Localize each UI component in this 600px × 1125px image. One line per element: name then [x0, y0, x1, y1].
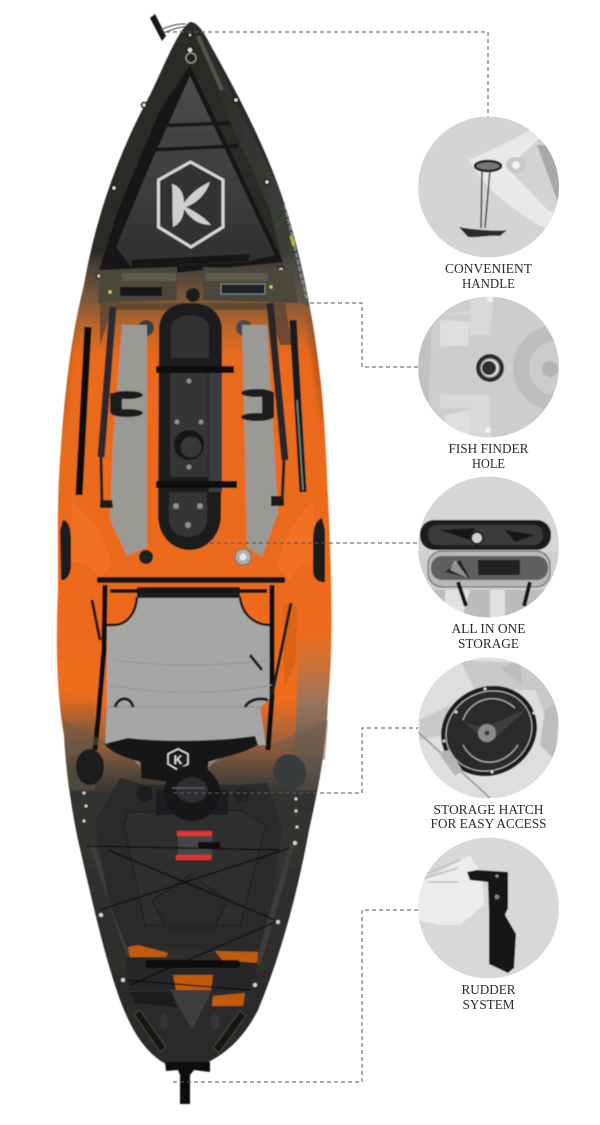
dashed leader lines: [166, 32, 488, 1082]
rear deck: [82, 792, 298, 1053]
deck clips: [96, 33, 284, 278]
centre storage pod: [156, 303, 237, 550]
rails: [79, 303, 303, 508]
side pads: [64, 720, 328, 794]
label: FOR EASY ACCESS: [430, 816, 546, 831]
deck knobs: [139, 549, 251, 565]
label: [448, 441, 528, 471]
bungee cords: [87, 846, 290, 990]
cockpit mats: [110, 325, 278, 557]
label: STORAGE HATCH: [434, 802, 544, 817]
label: CONVENIENT: [445, 261, 533, 276]
label: STORAGE: [458, 636, 519, 651]
photo: handle: [418, 116, 562, 258]
feature: convenient handle: [418, 116, 562, 291]
hull: [57, 22, 332, 1066]
seat: [92, 577, 291, 750]
photo: hatch: [418, 657, 560, 799]
hull shading: [54, 30, 334, 965]
side handles: [60, 518, 325, 582]
straps: [156, 366, 237, 488]
stern recesses: [160, 1014, 220, 1030]
label: [452, 621, 526, 651]
photo: fish finder hole: [418, 296, 559, 438]
feature: fish finder hole: [418, 296, 559, 468]
bow bag: [96, 33, 284, 278]
photo: rudder: [416, 837, 559, 979]
feature: rudder system: [416, 837, 559, 1012]
label: FISH FINDER: [448, 441, 528, 456]
bow handle: [150, 14, 187, 41]
seat front with logo: K: [174, 753, 183, 767]
photo: storage: [418, 476, 560, 620]
logo: [158, 162, 223, 247]
label: HANDLE: [462, 276, 515, 291]
stern rudder mount: [165, 1062, 210, 1104]
label: HOLE: [472, 456, 505, 471]
label: [462, 982, 516, 1012]
label: SYSTEM: [462, 997, 514, 1012]
label: RUDDER: [462, 982, 516, 997]
bow deck moulding: [98, 267, 298, 345]
safety sticker: [176, 831, 220, 860]
fittings: [82, 792, 298, 987]
label: ALL IN ONE: [452, 621, 526, 636]
kayak: [54, 14, 334, 1104]
label: [430, 802, 546, 831]
orange patches: [128, 945, 258, 963]
stern handles: [134, 1010, 246, 1053]
round hatch: [164, 765, 220, 821]
rear tank well: [95, 765, 282, 963]
feature: all in one storage: [418, 476, 560, 651]
feature: storage hatch: [418, 657, 560, 831]
seat front with logo: [103, 736, 258, 782]
label: [445, 261, 533, 291]
